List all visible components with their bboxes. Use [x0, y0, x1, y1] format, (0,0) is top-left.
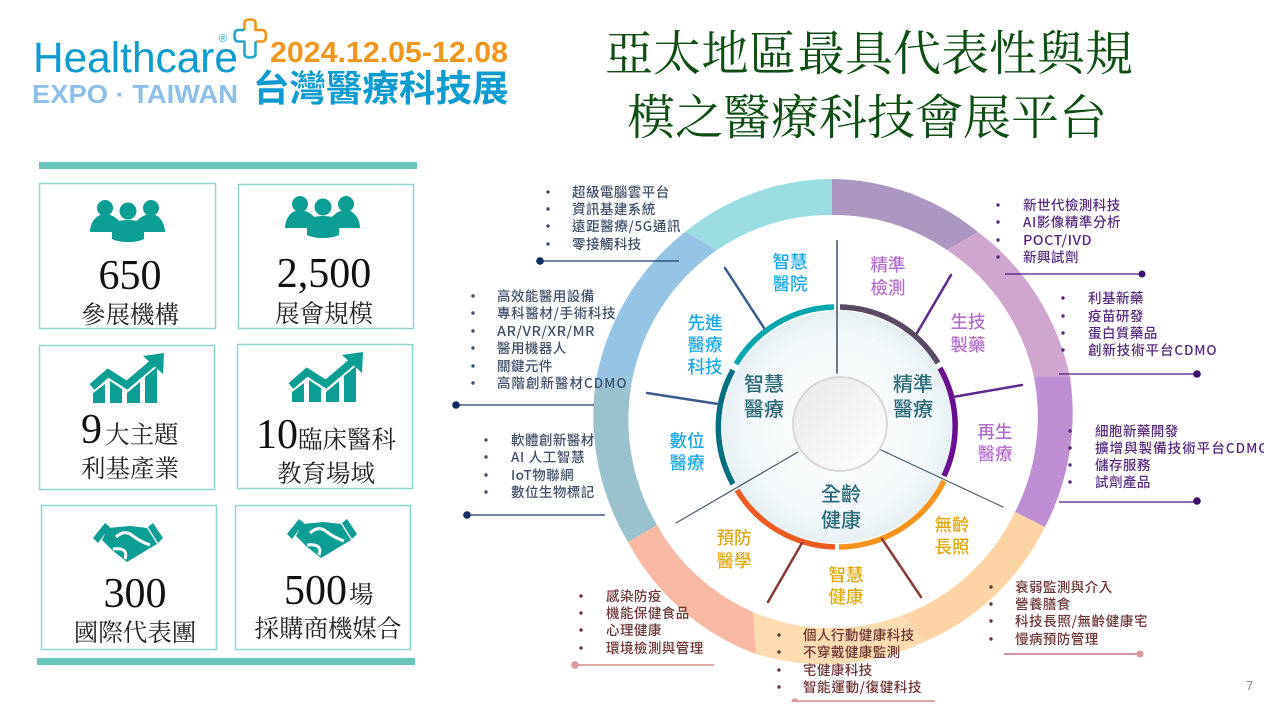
wheel label: biotech pharma: 製藥 [950, 332, 986, 356]
list: smart health: 個人行動健康科技 [803, 624, 915, 644]
title: 模之醫療科技會展平台 [627, 92, 1107, 145]
list: advanced medical tech: AR/VR/XR/MR [497, 320, 595, 340]
wheel label: precision testing: 檢測 [870, 274, 906, 300]
stat number: 2,500 [277, 251, 371, 297]
list: precision testing [996, 194, 1146, 278]
list: ageless care [989, 576, 1148, 658]
leader line [1059, 501, 1197, 503]
wheel label: advanced medical tech: 醫療 [688, 332, 723, 356]
leader dot [463, 511, 471, 519]
leader dot [1136, 650, 1144, 658]
list: digital medicine: IoT物聯網 [511, 464, 574, 484]
list: smart hospital: 超級電腦雲平台 [572, 181, 670, 201]
panel: 9 themes: 大主題 [105, 421, 179, 449]
title: 亞太地區最具代表性與規 [605, 28, 1133, 81]
list: regenerative medicine: 擴增與製備技術平台CDMO [1095, 437, 1269, 457]
list: precision testing: 新世代檢測科技 [1023, 194, 1121, 214]
icon: growth chart [92, 353, 164, 403]
leader line [540, 260, 679, 262]
icon: people [285, 196, 360, 238]
inner label: all-age health: 健康 [821, 504, 861, 532]
chart: central hub [793, 377, 887, 471]
list: smart health [777, 624, 935, 706]
leader line [456, 404, 594, 406]
list: biotech pharma: 利基新藥 [1088, 287, 1144, 307]
list: biotech pharma: 疫苗研發 [1088, 305, 1144, 325]
panel: 500 matchmaking sessions: 場 [349, 581, 374, 609]
list: advanced medical tech: 高效能醫用設備 [497, 285, 595, 305]
wheel label: biotech pharma: 生技 [950, 308, 986, 334]
list: preventive medicine: 環境檢測與管理 [606, 637, 704, 657]
chart: outer ring segments [593, 179, 1073, 664]
stat caption: 參展機構 [81, 301, 179, 329]
panel: 10 clinical venues [238, 344, 412, 488]
list: digital medicine: 數位生物標記 [511, 481, 595, 501]
bottom teal bar [37, 658, 415, 665]
icon: growth chart [291, 352, 363, 402]
leader dot [1193, 497, 1201, 505]
list: precision testing: 新興試劑 [1023, 246, 1079, 266]
list: smart hospital: 遠距醫療/5G通訊 [572, 215, 681, 235]
wheel label: smart health: 健康 [828, 584, 864, 608]
icon: handshake [93, 523, 163, 562]
list: biotech pharma [1059, 287, 1217, 378]
list: smart hospital: 零接觸科技 [572, 233, 642, 253]
panel: 300 delegations [42, 506, 216, 650]
wheel label: regenerative medicine: 再生 [978, 418, 1012, 444]
wheel label: digital medicine: 數位 [670, 428, 704, 452]
logo chinese name: 台灣醫療科技展 [253, 59, 508, 112]
title [605, 28, 1133, 145]
list: regenerative medicine: 細胞新藥開發 [1095, 420, 1179, 440]
wheel label: smart hospital: 智慧 [772, 248, 808, 274]
wheel label: advanced medical tech: 先進 [688, 310, 723, 334]
list: preventive medicine: 機能保健食品 [606, 602, 690, 622]
list: precision testing: AI影像精準分析 [1023, 211, 1121, 231]
leader line [1004, 653, 1140, 655]
list: digital medicine: 軟體創新醫材 [511, 429, 595, 449]
chart: inner coloured arcs [718, 307, 955, 547]
wheel label: ageless care: 無齡 [934, 512, 970, 536]
list: advanced medical tech: 專科醫材/手術科技 [497, 302, 616, 322]
leader dot [536, 257, 544, 265]
list: smart hospital: 資訊基建系統 [572, 198, 656, 218]
inner label: precision medicine: 醫療 [893, 392, 933, 422]
inner label: precision medicine: 精準 [893, 368, 933, 396]
wheel label: advanced medical tech: 科技 [688, 354, 723, 378]
wheel label: ageless care: 長照 [934, 534, 970, 558]
list: advanced medical tech: 醫用機器人 [497, 337, 567, 357]
list: advanced medical tech [452, 285, 627, 409]
leader line [1005, 273, 1142, 275]
page number: 7 [1246, 678, 1253, 693]
stat number and caption: 500 [284, 568, 347, 614]
wheel label: smart hospital: 醫院 [772, 270, 808, 296]
leader line [1059, 373, 1197, 375]
panel: 650 exhibitors [40, 184, 216, 329]
leader dot [791, 698, 799, 702]
wheel label: preventive medicine: 預防 [716, 524, 752, 550]
list: biotech pharma: 創新技術平台CDMO [1088, 339, 1217, 359]
wheel label: preventive medicine: 醫學 [716, 548, 752, 572]
wheel label: digital medicine: 醫療 [670, 450, 705, 474]
wheel label: precision testing: 精準 [870, 252, 906, 276]
list: ageless care: 營養膳食 [1015, 593, 1071, 613]
logo registered mark: ® [219, 33, 227, 45]
list: smart health: 不穿戴健康監測 [803, 641, 901, 661]
stat caption: 教育場域 [277, 460, 375, 488]
inner label: smart healthcare: 醫療 [744, 392, 784, 422]
wheel label: smart health: 智慧 [828, 562, 864, 586]
stat number: 650 [98, 253, 162, 299]
top teal bar [39, 162, 417, 169]
leader line [575, 664, 714, 666]
stat caption: 利基產業 [81, 455, 180, 483]
chart: inner disc [722, 311, 954, 543]
logo subtitle: EXPO · TAIWAN [32, 79, 238, 109]
chart: spokes [647, 241, 1022, 602]
stat number: 300 [104, 571, 166, 617]
panel: 9 themes [40, 346, 214, 490]
list: preventive medicine: 心理健康 [606, 619, 662, 639]
list: ageless care: 慢病預防管理 [1015, 628, 1099, 648]
list: regenerative medicine [1059, 420, 1269, 505]
wheel label: regenerative medicine: 醫療 [978, 440, 1013, 466]
leader dot [452, 401, 460, 409]
icon: handshake [287, 519, 357, 558]
stat caption: 國際代表團 [74, 619, 196, 647]
leader line [467, 514, 605, 516]
list: digital medicine: AI 人工智慧 [511, 446, 585, 466]
list: smart health: 宅健康科技 [803, 659, 873, 679]
list: regenerative medicine: 儲存服務 [1095, 454, 1151, 474]
list: precision testing: POCT/IVD [1023, 229, 1092, 249]
leader dot [571, 661, 579, 669]
logo: Healthcare Expo Taiwan [32, 20, 508, 112]
list: ageless care: 衰弱監測與介入 [1015, 576, 1113, 596]
stat caption: 採購商機媒合 [254, 615, 402, 643]
icon: people [90, 200, 165, 242]
stat number and caption: 10 [256, 412, 298, 458]
logo plus icon [234, 20, 266, 58]
leader line [795, 700, 935, 702]
list: preventive medicine: 感染防疫 [606, 585, 662, 605]
leader dot [1138, 270, 1146, 278]
list: regenerative medicine: 試劑產品 [1095, 471, 1151, 491]
list: smart hospital [536, 181, 681, 265]
list: ageless care: 科技長照/無齡健康宅 [1015, 610, 1148, 630]
stat number and caption: 9 [81, 407, 102, 453]
list: biotech pharma: 蛋白質藥品 [1088, 322, 1158, 342]
panel: 2,500 booths [238, 184, 414, 328]
leader dot [1193, 370, 1201, 378]
panel: 500 matchmaking sessions [236, 506, 410, 650]
panel: 10 clinical venues: 臨床醫科 [298, 426, 396, 454]
list: digital medicine [463, 429, 605, 519]
inner label: smart healthcare: 智慧 [744, 368, 784, 396]
inner label: all-age health: 全齡 [821, 478, 861, 506]
list: advanced medical tech: 關鍵元件 [497, 355, 553, 375]
stat caption: 展會規模 [275, 300, 373, 328]
list: advanced medical tech: 高階創新醫材CDMO [497, 372, 627, 392]
list: smart health: 智能運動/復健科技 [803, 676, 922, 696]
logo date: 2024.12.05-12.08 [270, 37, 508, 69]
list: preventive medicine [571, 585, 714, 669]
logo wordmark: Healthcare [33, 34, 238, 82]
